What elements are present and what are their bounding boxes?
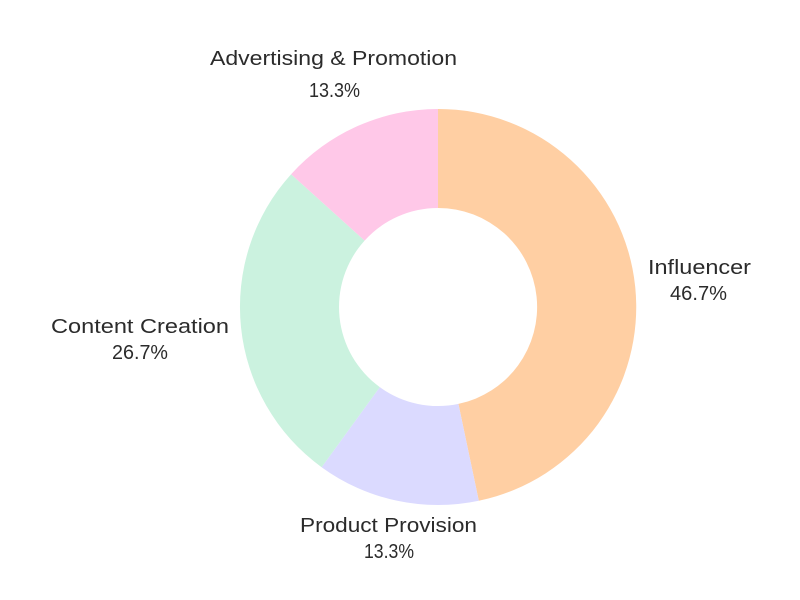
donut chart [240, 109, 636, 505]
segment: Advertising & Promotion 13.3% [291, 109, 438, 241]
label: Content Creation: 26.7% [112, 342, 168, 364]
segment: Content Creation 26.7% [240, 174, 380, 467]
label: Influencer [648, 257, 751, 305]
label: Advertising & Promotion: 13.3% [309, 80, 360, 102]
label: Product Provision [300, 515, 477, 563]
label: Influencer: 46.7% [670, 283, 727, 305]
label: Content Creation: Content Creation [51, 316, 229, 338]
segment: Product Provision 13.3% [322, 387, 479, 505]
label: Product Provision: 13.3% [364, 541, 414, 563]
label: Influencer: Influencer [648, 257, 751, 279]
label: Product Provision: Product Provision [300, 515, 477, 537]
label: Advertising & Promotion: Advertising & Promotion [210, 48, 457, 70]
segment: Influencer 46.7% [438, 109, 636, 501]
label: Advertising & Promotion [210, 48, 457, 102]
label: Content Creation [51, 316, 229, 364]
